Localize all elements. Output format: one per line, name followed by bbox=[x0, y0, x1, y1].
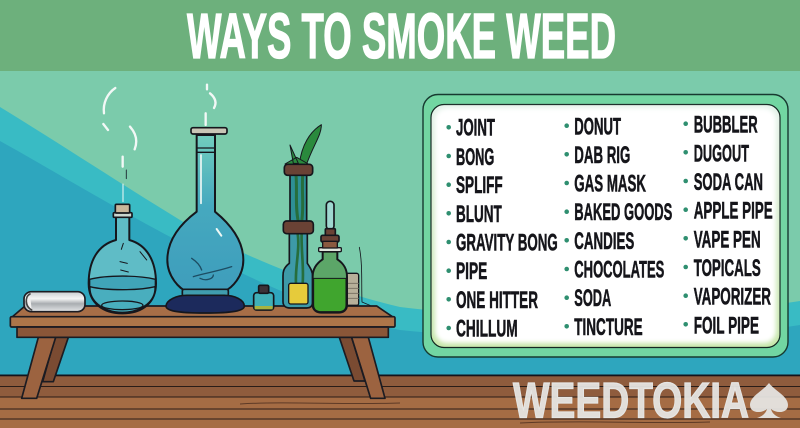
table bbox=[10, 306, 395, 398]
column 2 list: SODA bbox=[574, 285, 611, 312]
column 2 list: CANDIES bbox=[574, 228, 634, 255]
column 2 list: CHOCOLATES bbox=[574, 257, 664, 284]
column 2 list: TINCTURE bbox=[574, 314, 643, 341]
column 1 list: SPLIFF bbox=[456, 172, 503, 199]
panel: list of smoking methods bbox=[423, 94, 788, 357]
column 1 list: PIPE bbox=[456, 258, 487, 285]
icon: tall bong flask bbox=[166, 128, 244, 313]
front legs bbox=[22, 337, 385, 398]
column 3 list bbox=[683, 112, 773, 339]
icon: round flask bbox=[89, 204, 156, 313]
column 2 list bbox=[564, 113, 672, 341]
table top bbox=[10, 306, 395, 337]
icon: plant bbox=[285, 125, 321, 164]
title banner bbox=[0, 0, 800, 72]
icon: green dropper bottle bbox=[313, 201, 347, 313]
column 1 list: ONE HITTER bbox=[456, 287, 538, 314]
column 1 list: GRAVITY BONG bbox=[456, 230, 558, 257]
column 3 list: DUGOUT bbox=[694, 140, 749, 167]
illustration: table with glassware bbox=[10, 85, 395, 398]
column 2 list: BAKED GOODS bbox=[574, 199, 672, 226]
column 1 list: BLUNT bbox=[456, 201, 502, 228]
column 2 list: DONUT bbox=[574, 113, 621, 140]
column 2 list: GAS MASK bbox=[574, 171, 646, 198]
column 2 list: DAB RIG bbox=[574, 142, 630, 169]
icon: spade bbox=[750, 383, 788, 418]
smoke wisps bbox=[103, 85, 215, 202]
icon: tin can bbox=[343, 247, 370, 305]
watermark logo bbox=[513, 372, 788, 428]
column 1 list: CHILLUM bbox=[456, 316, 518, 343]
column 1 list: BONG bbox=[456, 144, 494, 171]
wooden floor bbox=[0, 374, 800, 428]
column 1 list: JOINT bbox=[456, 115, 495, 142]
back legs bbox=[43, 337, 365, 382]
icon: tube with yellow base bbox=[283, 164, 313, 308]
column 1 list bbox=[446, 115, 558, 343]
icon: small vial bbox=[254, 285, 274, 310]
icon: rolled foil bbox=[24, 292, 85, 312]
